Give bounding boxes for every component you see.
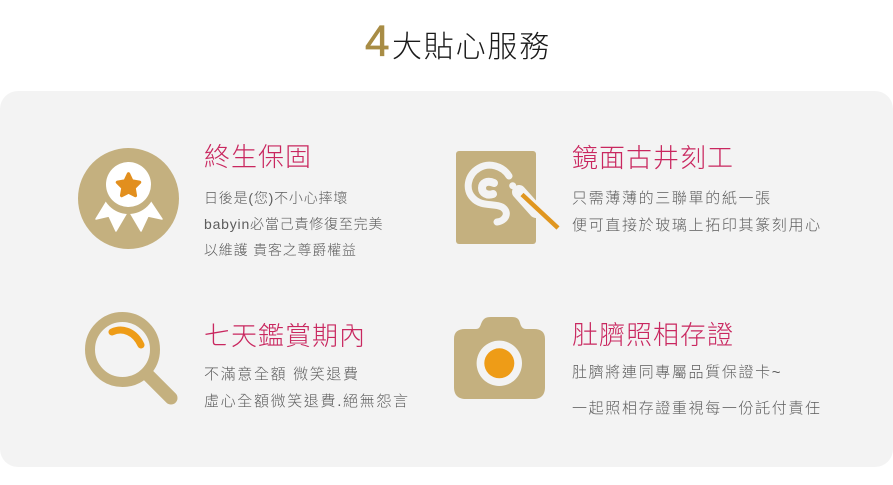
heading: seven day trial: 七天鑑賞期內 [204, 321, 366, 351]
text: navel photo: 肚臍將連同專屬品質保證卡~ [572, 364, 782, 381]
heading: lifetime warranty: 終生保固 [204, 142, 312, 172]
text: seven day trial: 不滿意全額 微笑退費 [204, 366, 360, 383]
text: navel photo [572, 364, 822, 417]
icon: camera [454, 317, 545, 399]
heading: mirror engraving: 鏡面古井刻工 [572, 143, 734, 173]
panel: services [0, 91, 893, 467]
title number: 4 [365, 17, 389, 66]
text: navel photo: 一起照相存證重視每一份託付責任 [572, 400, 822, 417]
text: mirror engraving: 便可直接於玻璃上拓印其篆刻用心 [572, 216, 822, 234]
title text: 大貼心服務 [392, 31, 551, 64]
text: lifetime warranty [204, 190, 383, 258]
text: mirror engraving [572, 190, 822, 234]
icon: magnifier [85, 312, 178, 404]
text: lifetime warranty: 以維護 貴客之尊爵權益 [204, 242, 357, 258]
title [365, 17, 551, 66]
text: mirror engraving: 只需薄薄的三聯單的紙一張 [572, 190, 772, 207]
text: seven day trial: 虛心全額微笑退費.絕無怨言 [204, 393, 410, 410]
text: seven day trial [204, 366, 410, 410]
text: lifetime warranty: 日後是(您)不小心摔壞 [204, 190, 348, 206]
icon: medal [78, 148, 179, 249]
text: lifetime warranty: babyin必當己責修復至完美 [204, 216, 383, 232]
icon: engraving [456, 151, 560, 244]
heading: navel photo: 肚臍照相存證 [572, 320, 734, 350]
